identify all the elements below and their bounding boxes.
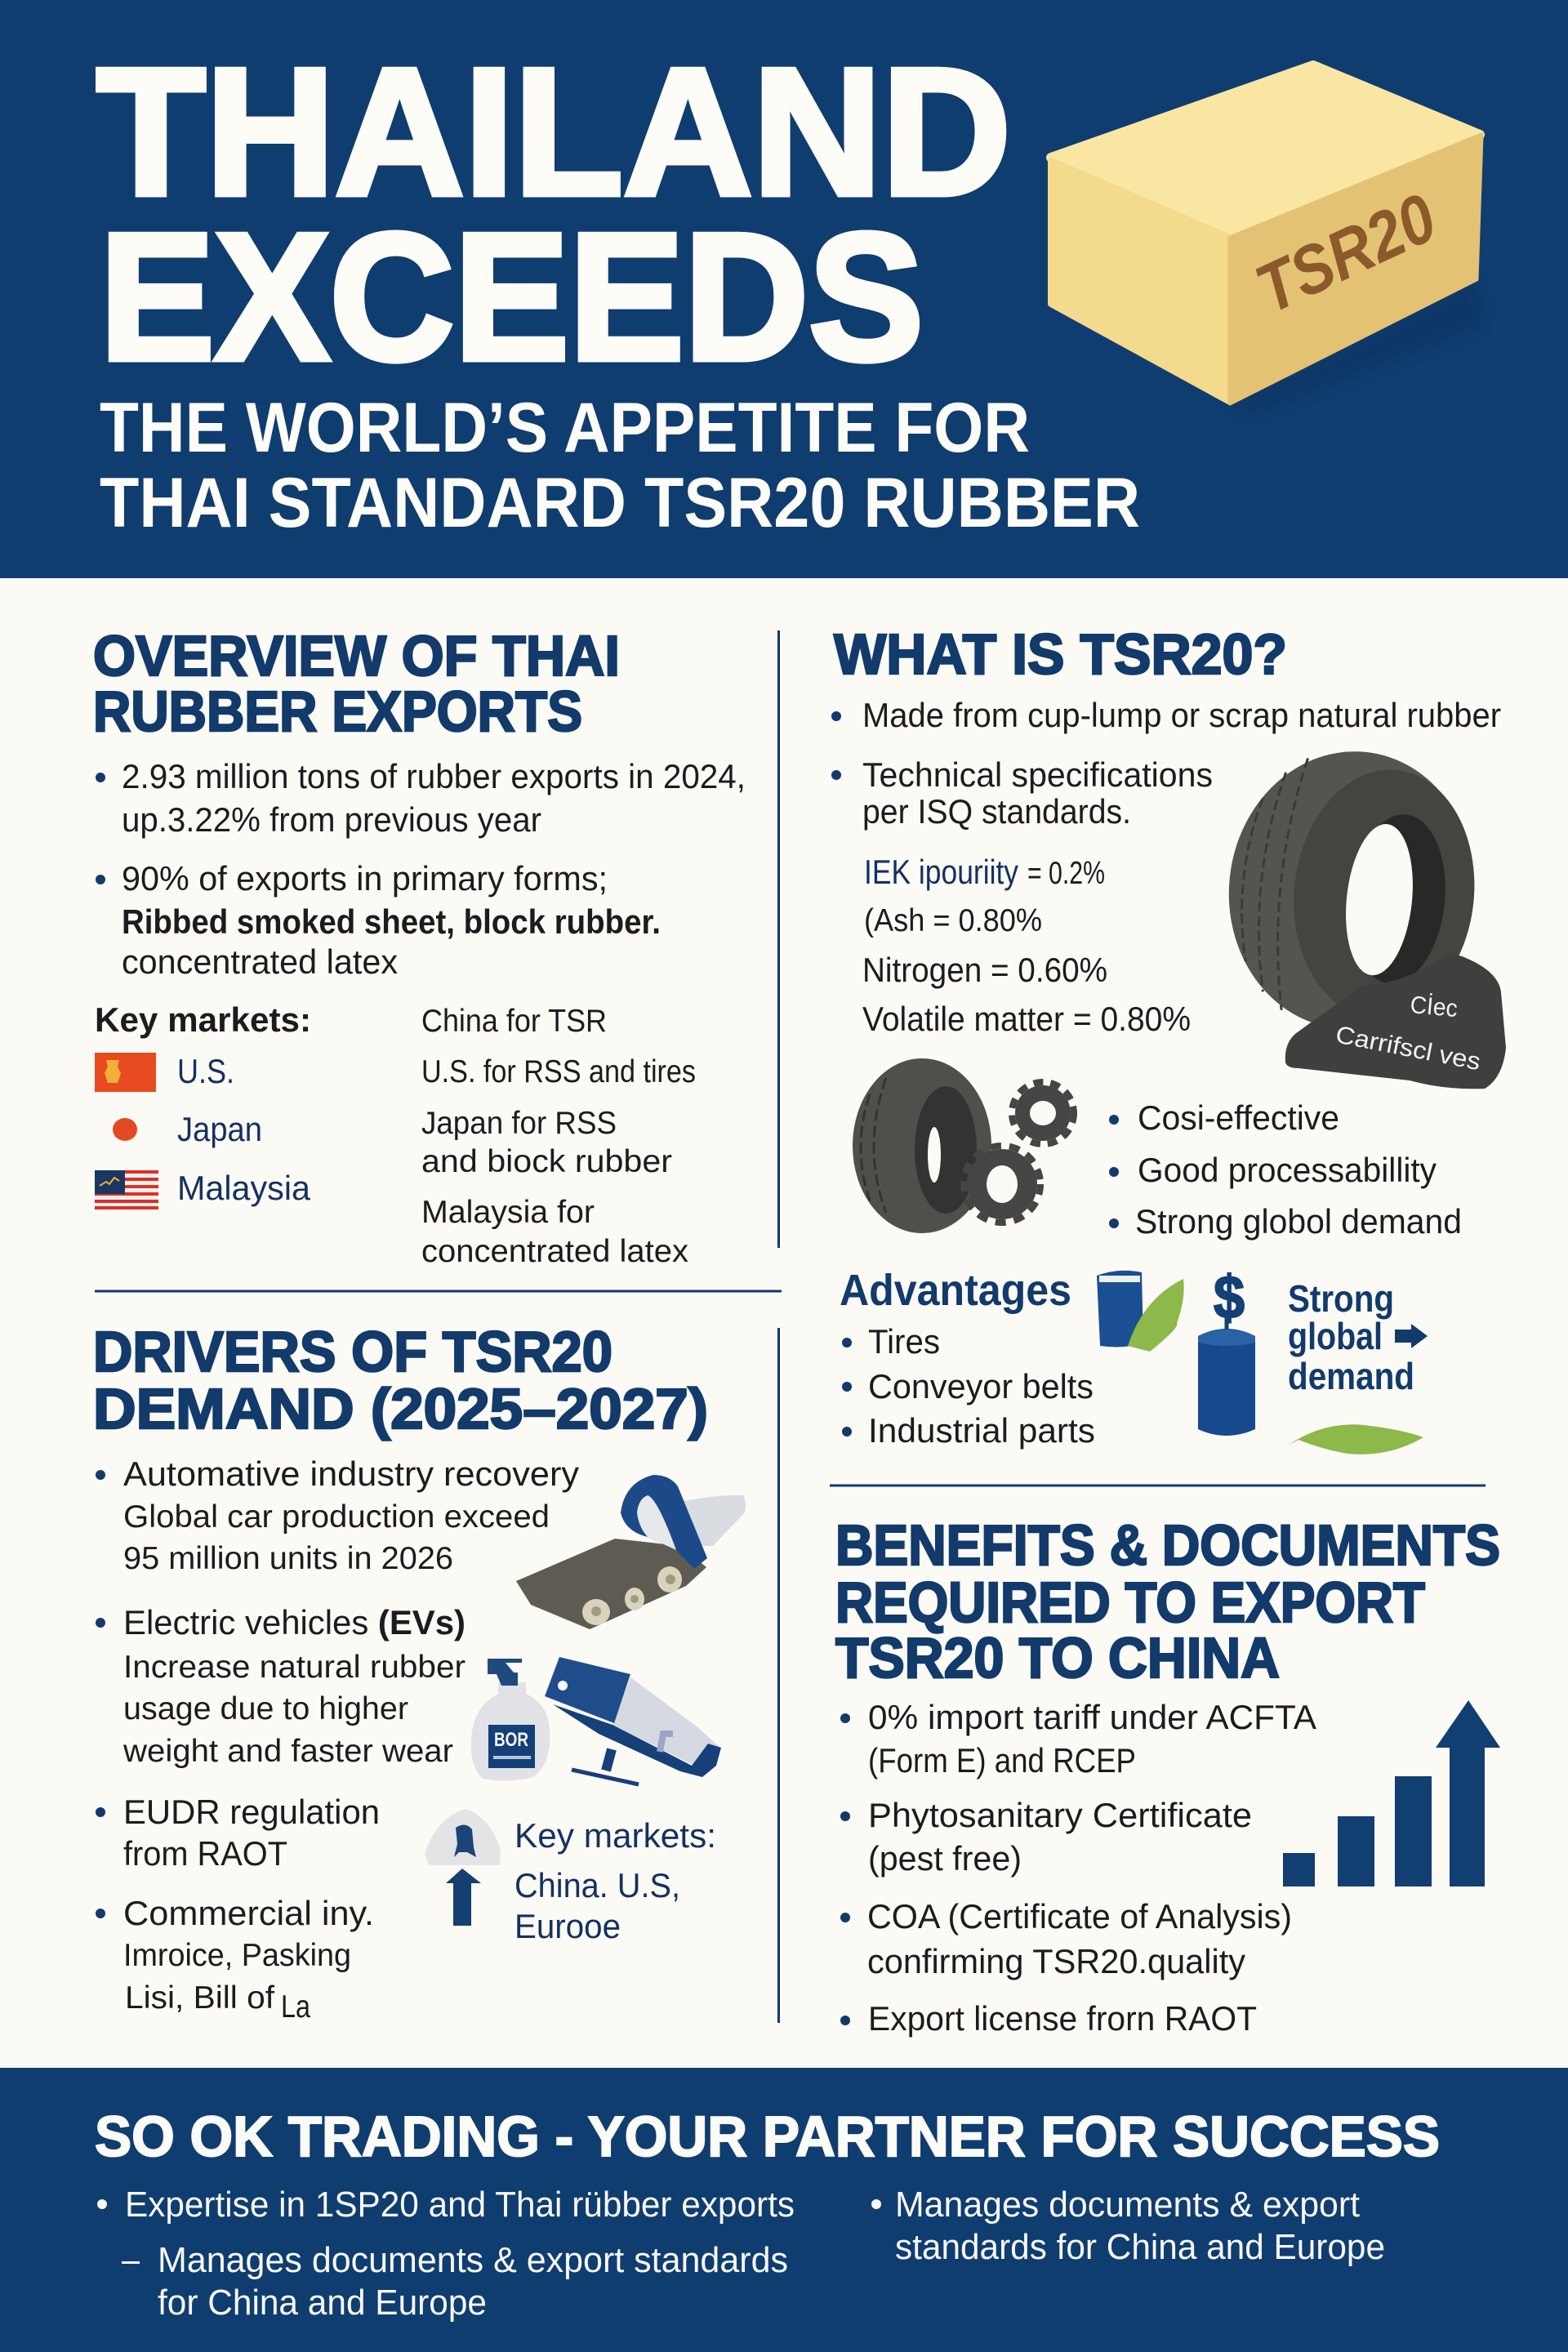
bullet: commercial invoice: La (281, 1989, 310, 2025)
market products: concentrated latex (421, 1234, 689, 1269)
heading: what is TSR20: WHAT IS TSR20? (834, 622, 1287, 686)
advantages list: Conveyor belts (868, 1367, 1094, 1405)
bullets: export facts: concentrated latex (122, 942, 398, 981)
advantages list (840, 1266, 1095, 1450)
subtitle: THAI STANDARD TSR20 RUBBER (100, 464, 1140, 542)
strong global demand label (1288, 1277, 1428, 1397)
bullets: export facts: Ribbed smoked sheet, block rubber. (122, 902, 661, 941)
key markets list (95, 1000, 696, 1269)
bullet: electric vehicles: Increase natural rubber (123, 1650, 466, 1685)
heading: benefits: REQUIRED TO EXPORT (835, 1570, 1425, 1634)
key markets list: Key markets: (95, 1000, 311, 1039)
title (96, 31, 1011, 399)
bullets: documents: 0% import tariff under ACFTA (868, 1698, 1316, 1736)
icon: person and up arrow (425, 1809, 501, 1926)
icon: dollar cylinder (1198, 1263, 1255, 1436)
bullets: documents: COA (Certificate of Analysis) (867, 1897, 1292, 1936)
arrow (1395, 1324, 1428, 1348)
header banner (0, 0, 1568, 578)
bullet: electric vehicles (96, 1603, 466, 1769)
heading: overview (93, 624, 620, 743)
bullets: export facts (96, 757, 746, 981)
market products: Malaysia for (421, 1195, 595, 1230)
heading: overview: RUBBER EXPORTS (93, 679, 582, 743)
bullet: EUDR regulation: EUDR regulation (123, 1793, 380, 1831)
bullets: specifications: = 0.2% (1027, 856, 1105, 891)
strong global demand label: demand (1288, 1355, 1414, 1397)
strong global demand label: global (1288, 1315, 1383, 1357)
icon: bucket and leaf (1097, 1271, 1184, 1352)
panel: what is TSR20 (831, 622, 1506, 1454)
bullets: documents: (Form E) and RCEP (868, 1741, 1136, 1780)
heading: benefits: TSR20 TO CHINA (835, 1626, 1280, 1690)
bullet: automotive recovery (96, 1454, 579, 1576)
bullet: commercial invoice: Commercial iny. (123, 1894, 374, 1932)
icon: spray bottle (471, 1659, 550, 1781)
bullets: documents: confirming TSR20.quality (867, 1942, 1245, 1980)
icon: red flag (95, 1053, 156, 1092)
icon: large tire (1215, 739, 1506, 1089)
market products: Japan for RSS (421, 1106, 617, 1141)
bullets: specifications: Technical specifications (862, 755, 1213, 794)
bullet: electric vehicles: Electric vehicles (EVs) (123, 1603, 466, 1642)
bullet: automotive recovery: 95 million units in 2026 (123, 1541, 453, 1576)
subtitle: THE WORLD’S APPETITE FOR (100, 389, 1030, 467)
panel: benefits and documents (835, 1513, 1500, 2038)
footer left list (97, 2185, 795, 2323)
icon: large tire: Cİec (1409, 991, 1459, 1022)
icon: Japan dot (113, 1118, 137, 1141)
key markets callout: China. U.S, (514, 1866, 680, 1904)
icon: striped flag (95, 1170, 158, 1209)
market products: and biock rubber (421, 1144, 672, 1179)
heading: drivers (93, 1320, 708, 1441)
bullets: specifications: Volatile matter = 0.80% (862, 1000, 1191, 1038)
title: EXCEEDS (100, 196, 924, 399)
advantages list: Advantages (840, 1266, 1071, 1315)
advantages list: Industrial parts (868, 1411, 1095, 1450)
heading: drivers: DEMAND (2025–2027) (93, 1377, 708, 1441)
bullet: commercial invoice (96, 1894, 374, 2025)
bullets: specifications (831, 696, 1501, 1038)
bullets: export facts: 90% of exports in primary forms; (122, 859, 608, 898)
key markets callout (514, 1816, 716, 1945)
key markets list: Japan (177, 1110, 262, 1148)
panel: drivers of TSR20 demand (93, 1320, 746, 2025)
heading: overview: OVERVIEW OF THAI (93, 624, 620, 688)
bullets: documents (840, 1698, 1316, 2038)
bullet: commercial invoice: Imroice, Pasking (123, 1938, 351, 1973)
subtitle (100, 389, 1140, 542)
bullets: properties (1109, 1098, 1462, 1241)
panel: overview of Thai rubber exports (0, 622, 1568, 2352)
icon: conveyor belt (516, 1475, 746, 1629)
icon: green leaf (1286, 1424, 1423, 1454)
key markets list: Malaysia (177, 1169, 311, 1207)
bullet: EUDR regulation: from RAOT (123, 1834, 287, 1873)
bullets: properties: Good processabillity (1138, 1151, 1437, 1189)
heading: benefits: BENEFITS & DOCUMENTS (835, 1513, 1500, 1577)
bullets: export facts: 2.93 million tons of rubber exports in 2024, (122, 757, 746, 795)
bullet: electric vehicles: weight and faster wear (122, 1734, 453, 1769)
bullets: specifications: per ISQ standards. (862, 792, 1131, 831)
bullets: specifications: (Ash = 0.80% (864, 903, 1042, 938)
bullet: automotive recovery: Global car production exceed (123, 1499, 550, 1535)
bullets: properties: Strong globol demand (1135, 1202, 1462, 1241)
footer heading: SO OK TRADING - YOUR PARTNER FOR SUCCESS (95, 2105, 1440, 2168)
bar chart with growth arrow (1283, 1700, 1500, 1886)
footer left list: for China and Europe (158, 2283, 487, 2323)
footer banner (0, 2068, 1568, 2352)
title: THAILAND (96, 31, 1011, 234)
key markets callout: Key markets: (514, 1816, 716, 1855)
market products: U.S. for RSS and tires (421, 1054, 696, 1089)
bullets: specifications: Made from cup-lump or scrap natural rubber (862, 696, 1501, 734)
key markets list: U.S. (177, 1052, 234, 1090)
market products: China for TSR (421, 1004, 607, 1039)
bullet: EUDR regulation (96, 1793, 380, 1873)
bullets: specifications: Nitrogen = 0.60% (862, 951, 1107, 989)
bullets: documents: Phytosanitary Certificate (868, 1796, 1252, 1834)
icon: blue scraper device (545, 1657, 721, 1784)
market products (421, 1004, 696, 1269)
bullet: electric vehicles: usage due to higher (123, 1691, 408, 1726)
key markets callout: Eurooe (514, 1907, 621, 1945)
icon: tire with gears (853, 1058, 1074, 1233)
icon: spray bottle: BOR (494, 1729, 528, 1751)
footer right list: Manages documents & export (895, 2185, 1360, 2225)
footer left list: Expertise in 1SP20 and Thai rübber exports (125, 2185, 795, 2225)
icon: dollar cylinder: $ (1214, 1263, 1245, 1331)
footer right list: standards for China and Europe (895, 2227, 1385, 2267)
bullet: commercial invoice: Lisi, Bill of (125, 1980, 274, 2016)
bullets: export facts: up.3.22% from previous year (122, 800, 541, 839)
icon: large tire: Carrifscl ves (1334, 1021, 1483, 1076)
bullets: documents: Export license frorn RAOT (868, 1999, 1257, 2038)
bullets: documents: (pest free) (868, 1839, 1022, 1878)
advantages list: Tires (868, 1322, 940, 1361)
heading: benefits (835, 1513, 1500, 1690)
icon: TSR20 rubber block: TSR20 (1245, 179, 1447, 327)
bullets: properties: Cosi-effective (1138, 1098, 1339, 1137)
icon: TSR20 rubber block (1051, 65, 1483, 416)
strong global demand label: Strong (1288, 1277, 1394, 1320)
heading: drivers: DRIVERS OF TSR20 (93, 1320, 612, 1383)
bullets: specifications: IEK ipouriity (864, 853, 1018, 891)
bullet: automotive recovery: Automative industry recovery (123, 1454, 579, 1493)
footer left list: Manages documents & export standards (158, 2240, 788, 2280)
footer right list (871, 2185, 1385, 2267)
